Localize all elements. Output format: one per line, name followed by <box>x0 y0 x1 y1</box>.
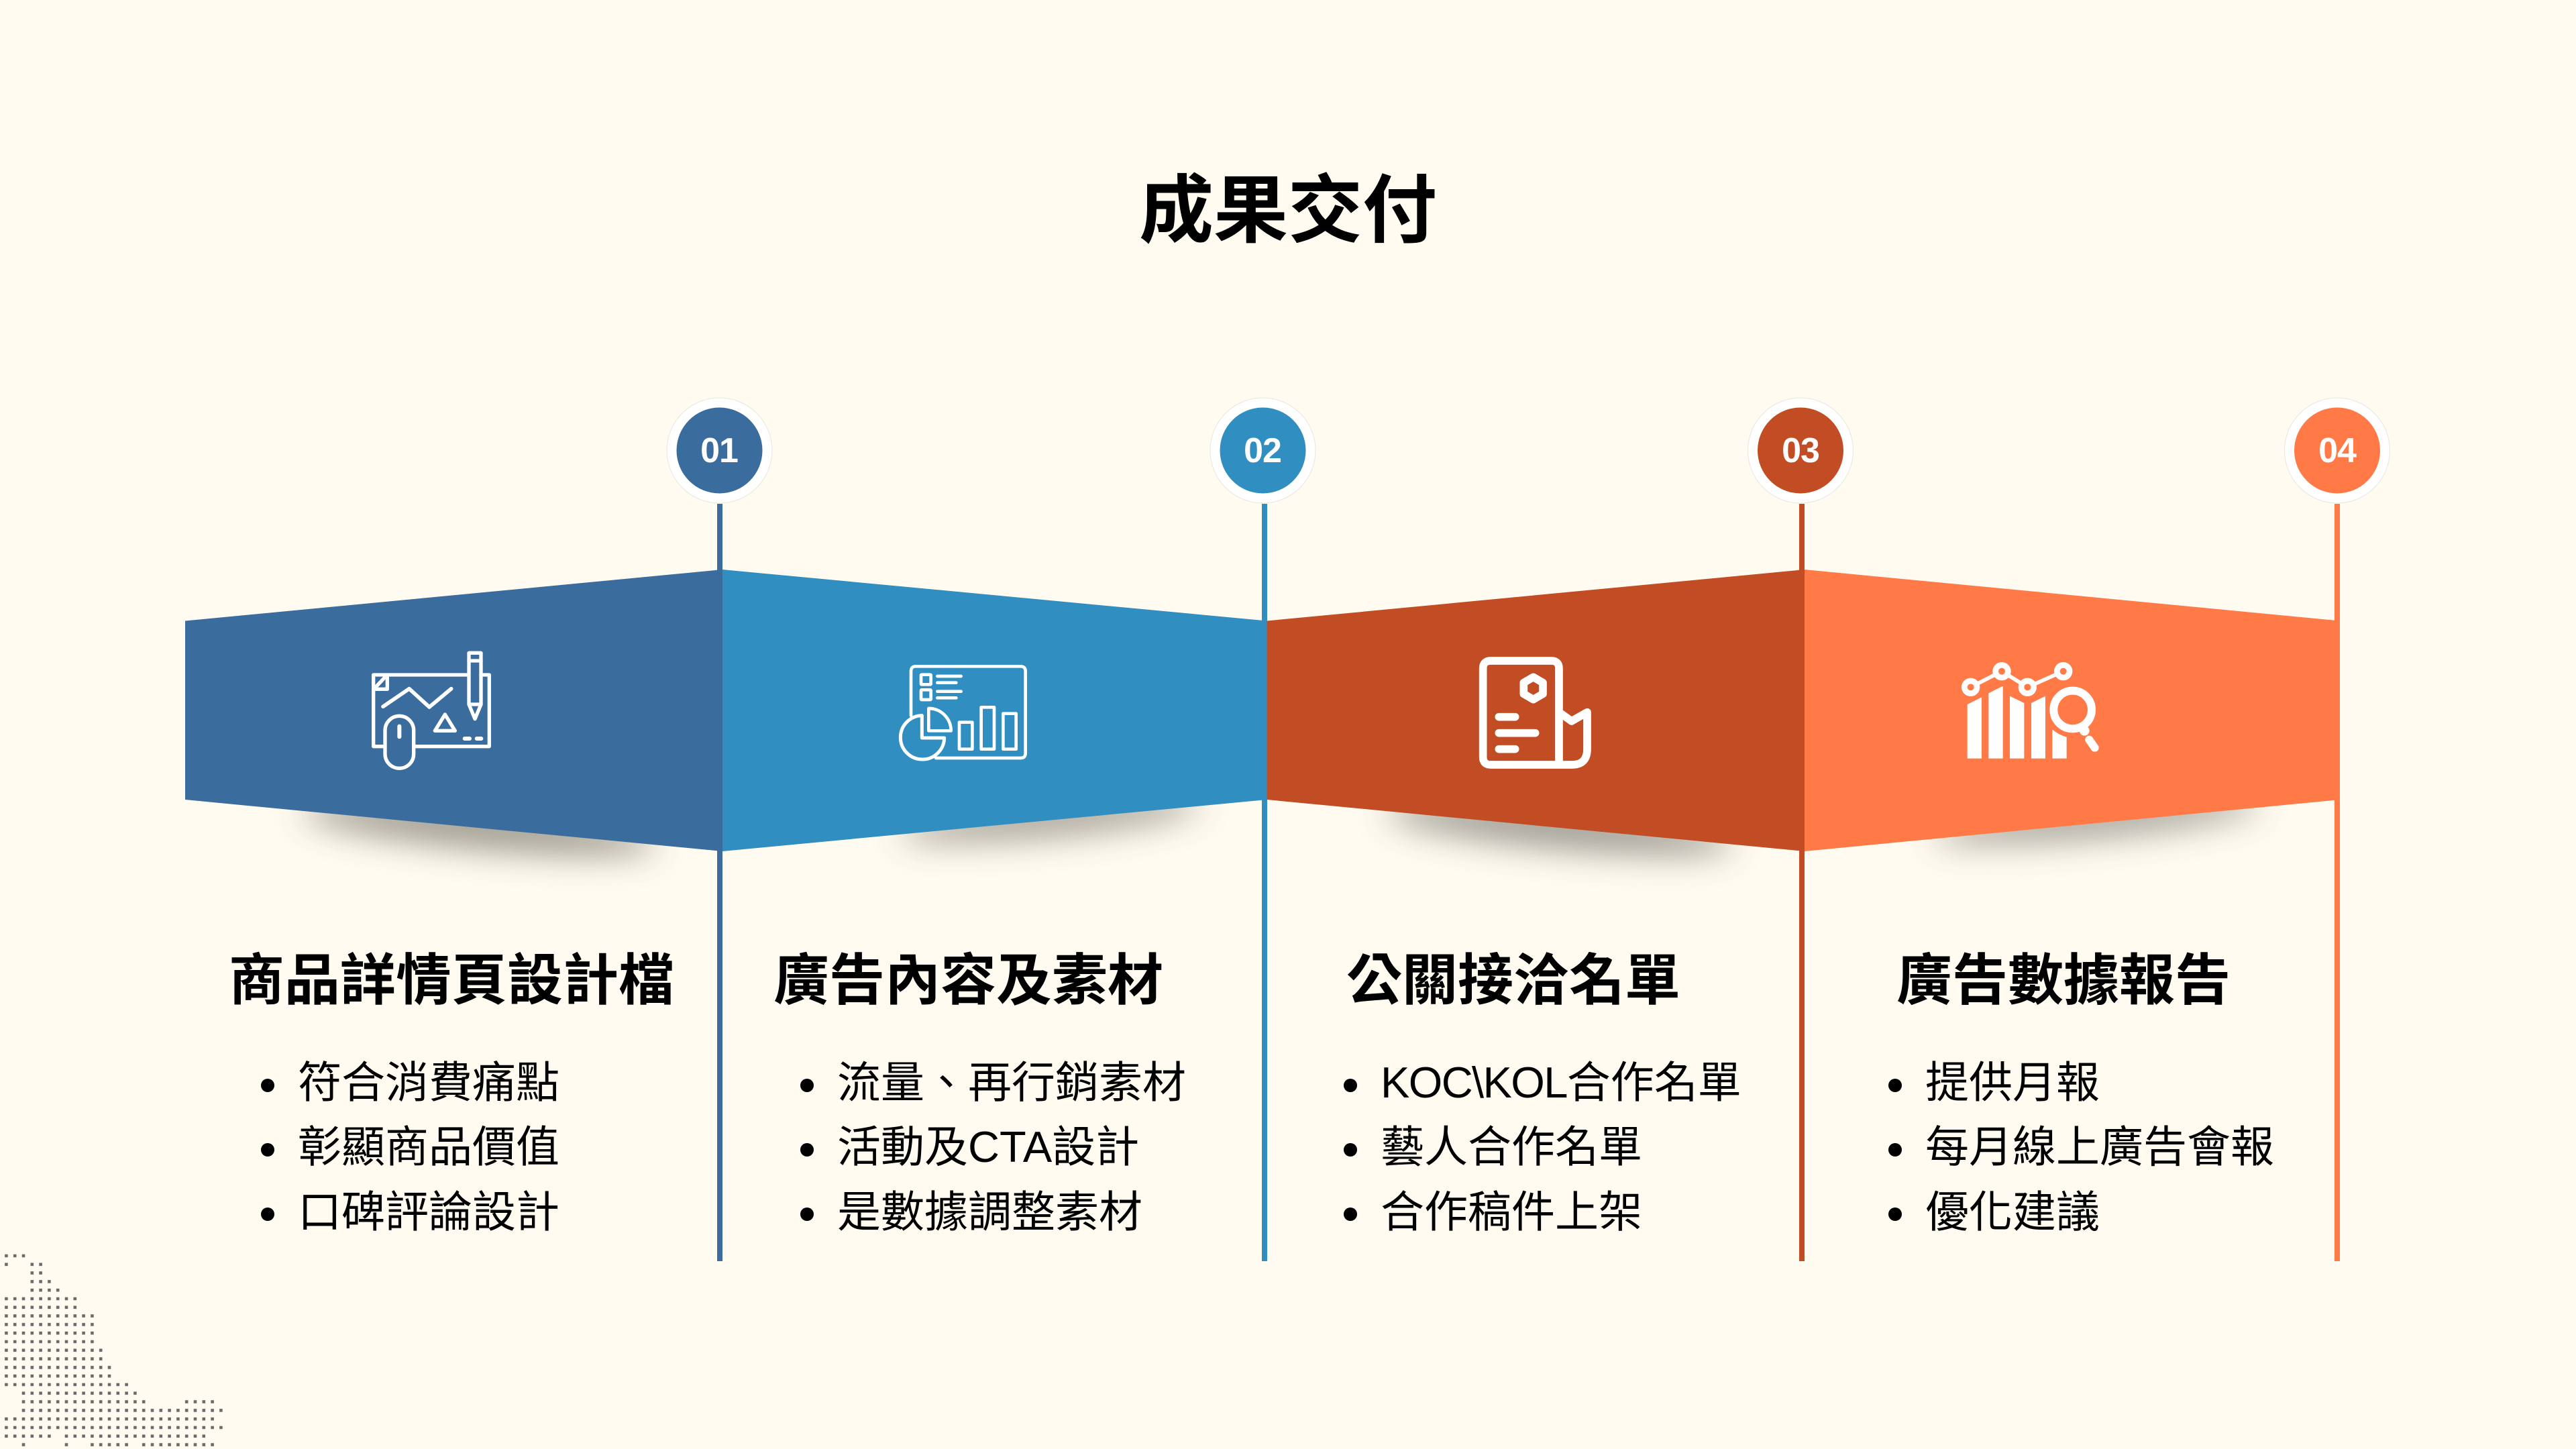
band segment 4 <box>1805 570 2340 851</box>
bullet list: column 2: 活動及CTA設計 <box>837 1122 1139 1171</box>
heading: column 2: 廣告內容及素材 <box>773 949 1163 1012</box>
band segment 3 <box>1267 570 1805 851</box>
heading: column 3: 公關接洽名單 <box>1346 949 1680 1012</box>
bullet list: column 3: 合作稿件上架 <box>1381 1187 1642 1236</box>
timeline line 04 <box>2334 504 2340 1261</box>
bullet list: column 4: 提供月報 <box>1925 1058 2100 1107</box>
number badge 03: 03 <box>1782 431 1819 470</box>
timeline line 02 <box>1262 504 1267 1261</box>
bullet list: column 1: 符合消費痛點 <box>298 1058 559 1107</box>
bullet list: column 2: 是數據調整素材 <box>837 1187 1142 1236</box>
band segment 2 <box>722 570 1267 851</box>
timeline line 03 <box>1799 504 1805 1261</box>
title: 成果交付 <box>1139 169 1437 252</box>
bullet list: column 4 <box>1888 1058 2274 1236</box>
bullet list: column 3 <box>1344 1058 1741 1236</box>
icon: bar chart with magnifier <box>1964 665 2095 759</box>
number badge 01: 01 <box>700 431 738 470</box>
heading: column 1: 商品詳情頁設計檔 <box>229 949 674 1012</box>
timeline line 01 <box>717 504 722 1261</box>
icon: dashboard with charts <box>900 666 1026 759</box>
bullet list: column 1: 口碑評論設計 <box>298 1187 559 1236</box>
number badge 03 <box>1748 398 1853 503</box>
heading: column 4: 廣告數據報告 <box>1896 949 2231 1012</box>
bullet list: column 1 <box>261 1058 559 1236</box>
band shadows <box>301 787 2261 865</box>
bullet list: column 4: 優化建議 <box>1925 1187 2100 1236</box>
bullet list: column 2: 流量、再行銷素材 <box>837 1058 1186 1107</box>
number badge 04: 04 <box>2318 431 2357 470</box>
icon: document with hexagon badge <box>1483 661 1587 765</box>
number badge 02 <box>1210 398 1316 503</box>
band segment 1 <box>185 570 722 851</box>
number badge 01 <box>667 398 772 503</box>
bullet list: column 3: KOC\KOL合作名單 <box>1381 1058 1741 1107</box>
decorative dot pattern <box>5 1256 223 1445</box>
bullet list: column 2 <box>800 1058 1186 1236</box>
icon: design tablet with mouse and pencil <box>374 653 489 768</box>
bullet list: column 3: 藝人合作名單 <box>1381 1122 1642 1171</box>
number badge 02: 02 <box>1244 431 1281 470</box>
number badge 04 <box>2285 398 2390 503</box>
bullet list: column 1: 彰顯商品價值 <box>298 1122 559 1171</box>
bullet list: column 4: 每月線上廣告會報 <box>1925 1122 2274 1171</box>
